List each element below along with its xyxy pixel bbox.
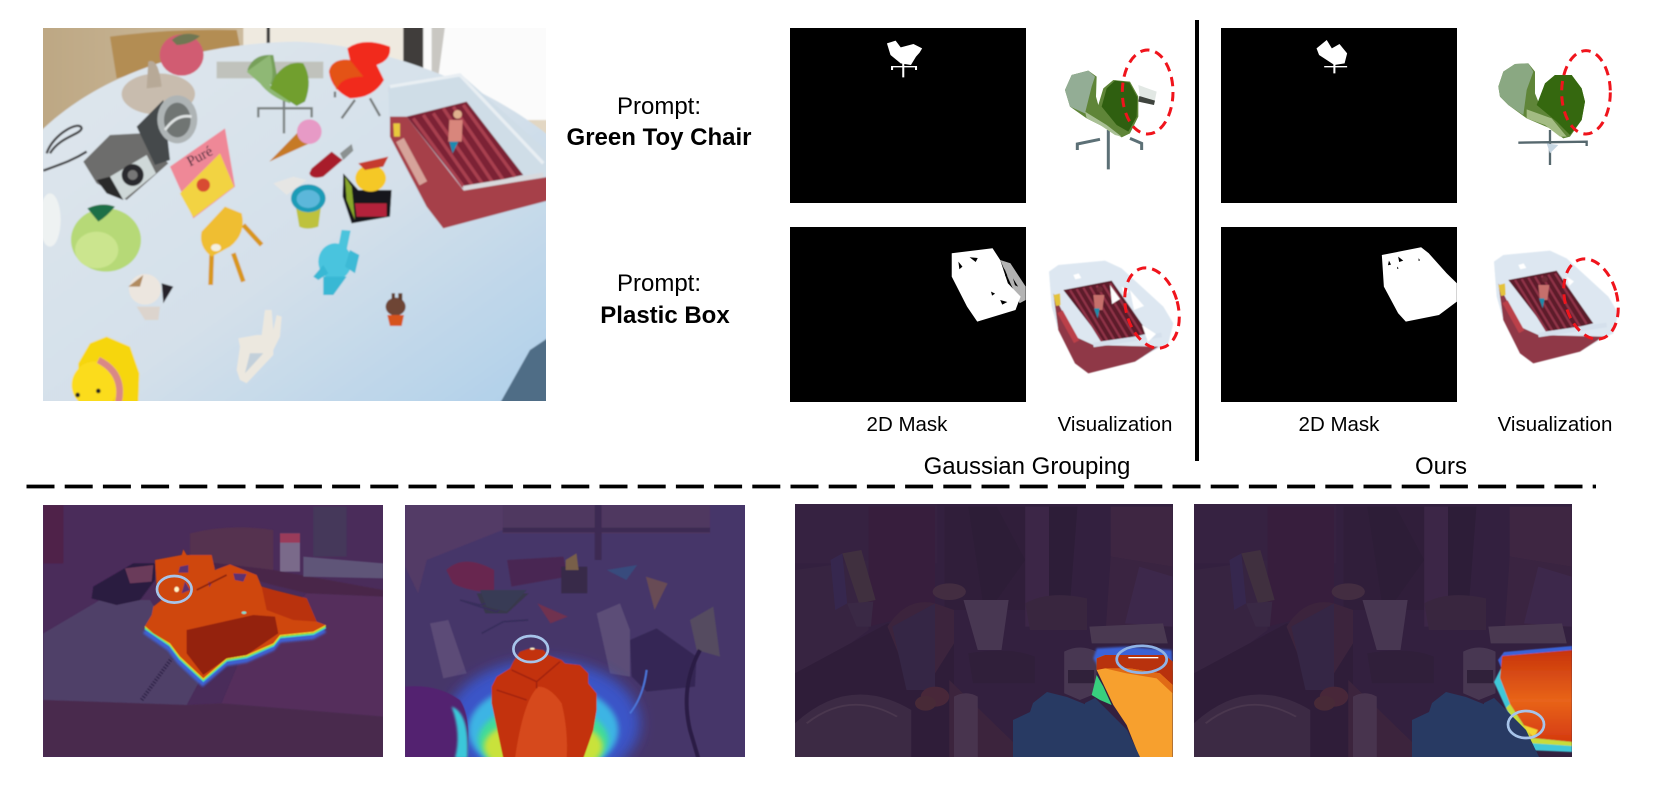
mask: box, Ours	[1221, 227, 1457, 402]
oven mitt over the heat	[1085, 698, 1140, 757]
panel: Ours results	[1221, 28, 1627, 402]
icon: green apple plush	[71, 205, 141, 272]
panel: input photo of toys on a table	[39, 27, 550, 408]
bulldozer hot region	[145, 549, 326, 678]
icon: green toy chair	[217, 55, 323, 133]
icon: play-doh tub	[291, 184, 326, 229]
icon: red kitchen spatula	[273, 144, 353, 195]
table surface	[40, 42, 550, 403]
icon: Rubik's cube with rubber duck	[343, 157, 392, 223]
red dashed highlight	[1562, 51, 1610, 134]
icon: vintage camera with flash and strap	[43, 95, 197, 200]
panel: pumpkin heatmap	[405, 505, 745, 757]
icon: red toy chair	[329, 42, 390, 118]
highlight circle	[1117, 646, 1167, 673]
lower room objects	[430, 590, 720, 692]
mask: chair, Ours	[1221, 28, 1457, 203]
panel: kitchen heatmap, Ours	[1189, 500, 1579, 763]
column caption: Visualization: Visualization	[1058, 413, 1172, 436]
wood wall and windows background	[43, 28, 546, 134]
board hot region	[1097, 655, 1173, 758]
vertical divider	[1195, 20, 1199, 461]
icon: yellow dog figure	[201, 207, 262, 285]
board hot region	[1500, 650, 1572, 742]
cut-out: plastic box, Ours	[1494, 251, 1627, 363]
horizontal dashed separator	[26, 485, 1596, 488]
icon: snack pouch with yellow character: Puré	[184, 143, 216, 170]
cut-out: green chair, Ours	[1498, 51, 1610, 165]
heat glow around pumpkin	[405, 651, 648, 757]
icon: cat figurine	[128, 274, 173, 320]
highlight circle	[1508, 711, 1544, 738]
room background	[405, 505, 710, 623]
red dashed highlight	[1555, 253, 1627, 345]
icon: yellow rubber duck	[72, 337, 139, 408]
icon: ice cream cone toy	[269, 119, 322, 162]
panel: Gaussian Grouping results	[790, 28, 1188, 402]
highlight circle	[157, 576, 192, 603]
pumpkin hot region	[492, 648, 597, 758]
oven mitt over the heat	[1484, 698, 1539, 757]
prompt label: plastic box: Plastic Box	[600, 302, 730, 329]
icon: small brown bear figure	[386, 293, 406, 326]
icon: white ceramic hand	[237, 310, 282, 383]
mask: chair, Gaussian Grouping	[790, 28, 1026, 203]
column caption: 2D Mask: 2D Mask	[867, 413, 948, 436]
red dashed highlight	[1122, 50, 1173, 134]
highlight circle	[513, 636, 548, 662]
prompt label: plastic box: Prompt:	[617, 270, 701, 297]
red dashed highlight	[1116, 262, 1188, 354]
prompt label: green toy chair: Prompt:	[617, 93, 701, 120]
dim veil over the room	[430, 505, 720, 692]
prompt label: green toy chair	[567, 93, 751, 151]
cut-out: plastic box, Gaussian Grouping	[1049, 261, 1188, 373]
room background	[43, 505, 383, 757]
icon: plastic box of red licorice	[388, 73, 550, 230]
cut-out: green chair, Gaussian Grouping	[1065, 50, 1173, 169]
panel: kitchen heatmap, Gaussian Grouping	[790, 500, 1180, 763]
heat glow on the board	[1092, 647, 1173, 705]
heat fringe at the bulldozer base	[144, 625, 326, 684]
method heading: Ours: Ours	[1415, 453, 1467, 480]
prompt label: green toy chair: Green Toy Chair	[567, 124, 751, 151]
icon: snack pouch with yellow character	[170, 128, 235, 218]
column caption: 2D Mask, Ours: 2D Mask	[1299, 413, 1380, 436]
mask: box, Gaussian Grouping	[790, 227, 1026, 402]
icon: beige pumpkin plush	[122, 61, 195, 115]
icon: toy figure in striped shirt	[448, 110, 463, 153]
column caption: Visualization, Ours: Visualization	[1498, 413, 1612, 436]
icon: blue bunny toy	[313, 230, 359, 295]
method heading: Gaussian Grouping: Gaussian Grouping	[924, 453, 1130, 480]
heat glow at board edges	[1494, 646, 1572, 752]
panel: bulldozer heatmap	[43, 505, 383, 757]
prompt label: plastic box	[600, 270, 730, 329]
icon: strawberry plush	[160, 34, 204, 76]
